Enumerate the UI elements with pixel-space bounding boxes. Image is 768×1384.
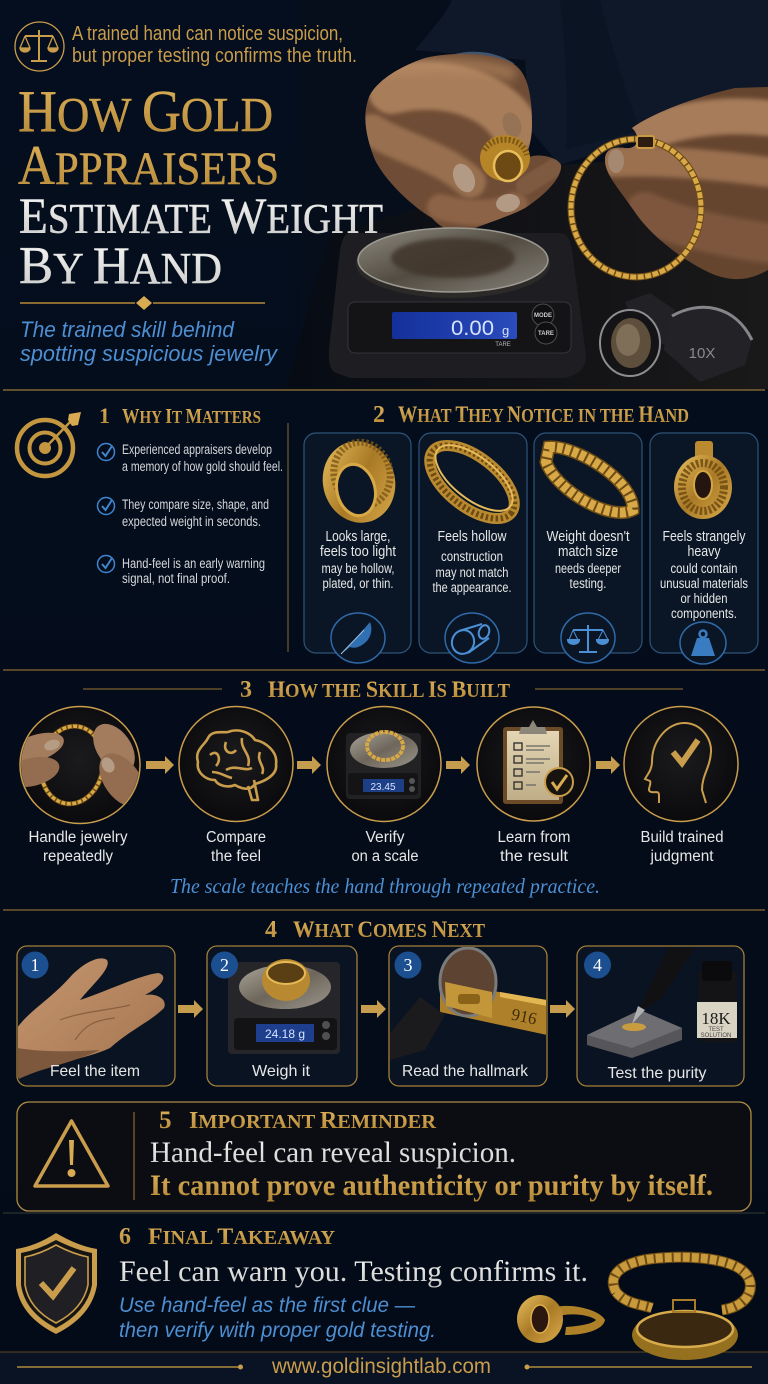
panel: final takeaway: then verify with proper gold testing. [119, 1319, 436, 1342]
top quote with scale icon [15, 22, 357, 71]
heading: what they notice in the hand: WHAT THEY NOTICE IN THE HAND [398, 402, 689, 427]
card: weight does not match size: needs deeper [555, 561, 621, 576]
panel: final takeaway: Use hand-feel as the first clue — [119, 1294, 416, 1317]
step: verify on a scale [327, 706, 441, 865]
right hand [600, 85, 768, 285]
subtitle [20, 317, 279, 366]
table [285, 150, 768, 389]
number badge [584, 952, 611, 978]
number badge: 4 [593, 955, 602, 975]
icon: balance [561, 613, 615, 663]
arrow [361, 1000, 386, 1018]
step: verify on a scale: on a scale [352, 848, 418, 865]
heading: what they notice in the hand: 2 [373, 402, 385, 428]
card: weight does not match size: match size [558, 543, 618, 560]
heading: how the skill is built [83, 677, 683, 703]
step: build trained judgment: judgment [650, 848, 714, 865]
icon: pen, stone and acid bottle: TEST [708, 1027, 724, 1033]
icon: shield with check [16, 1233, 97, 1334]
icon: curb chain [546, 447, 633, 513]
title: ESTIMATE WEIGHT [19, 189, 383, 245]
hero photo: hands, scale, bracelet and loupe [285, 0, 768, 389]
card: feels hollow: may not match [436, 565, 508, 580]
icon: loupe over hallmark band [390, 948, 547, 1060]
arrow [178, 1000, 203, 1018]
card: weight does not match size [534, 433, 642, 663]
card: looks large, feels too light: plated, or thin. [322, 576, 394, 591]
gold ring in fingers [480, 135, 530, 181]
arrow [146, 756, 174, 774]
jacket [415, 0, 768, 165]
card: looks large, feels too light: Looks large, [326, 528, 390, 545]
step: compare the feel [179, 706, 293, 865]
number badge [22, 952, 48, 978]
subtitle: The trained skill behind [20, 317, 235, 342]
card: looks large, feels too light: may be hollow, [322, 561, 394, 576]
card: feels strangely heavy: could contain [670, 561, 738, 576]
heading: what comes next: 4 [265, 917, 277, 943]
icon: open palm [17, 958, 165, 1080]
digital scale: TARE [495, 342, 511, 348]
scale readout: 0.00 [451, 317, 494, 340]
checklist: They compare size, shape, and [122, 497, 269, 512]
icon: hollow cylinder [445, 613, 499, 663]
icon: scale with ring [228, 959, 340, 1054]
icon: gold pendant [674, 441, 732, 519]
footer [0, 1352, 768, 1384]
card: weight does not match size: testing. [570, 576, 606, 591]
card: feels strangely heavy: Feels strangely [662, 528, 746, 545]
icon: hollow filigree ring [417, 432, 527, 532]
icon: small scale with ring: 23.45 [370, 782, 396, 793]
top quote with scale icon: A trained hand can notice suspicion, [72, 23, 343, 45]
checklist: signal, not final proof. [122, 571, 230, 586]
title: HOW GOLD [18, 78, 273, 144]
digital scale: TARE [538, 331, 554, 337]
arrow [596, 756, 620, 774]
icon: kettle weight [680, 622, 726, 664]
step: compare the feel: the feel [211, 848, 261, 865]
heading: important reminder: 5 [159, 1107, 172, 1134]
icon: head with check mark [645, 723, 711, 803]
heading: important reminder: IMPORTANT REMINDER [189, 1108, 436, 1134]
subtitle: spotting suspicious jewelry [20, 341, 279, 366]
panel: final takeaway [16, 1224, 750, 1360]
icon: engraved gold ring [314, 434, 404, 530]
icon: scale with ring: 24.18 g [265, 1027, 305, 1041]
left hand [365, 54, 562, 228]
checklist: a memory of how gold should feel. [122, 459, 283, 474]
footer: www.goldinsightlab.com [271, 1355, 491, 1378]
arrow [297, 756, 321, 774]
step: handle jewelry repeatedly [19, 706, 141, 864]
title [18, 78, 383, 295]
icon: clipboard checklist [503, 720, 573, 804]
icon: balance scale [15, 22, 64, 71]
step: build trained judgment [624, 706, 738, 865]
card: looks large, feels too light: feels too light [320, 543, 397, 560]
icon: pen, stone and acid bottle: SOLUTION [701, 1033, 731, 1039]
heading: how the skill is built: HOW THE SKILL IS BUILT [268, 677, 510, 702]
heading: why it matters: 1 [99, 403, 110, 428]
panel: final takeaway: Feel can warn you. Testing confirms it. [119, 1255, 588, 1288]
title: BY HAND [19, 237, 222, 295]
card: feels hollow: Feels hollow [438, 528, 507, 545]
card: feels strangely heavy: components. [671, 606, 737, 621]
card: feels strangely heavy: unusual materials [660, 576, 748, 591]
icon: loupe over hallmark band: 916 [510, 1005, 539, 1029]
card: feels strangely heavy: heavy [688, 543, 721, 560]
number badge: 2 [220, 955, 229, 975]
arrow [446, 756, 470, 774]
panel: important reminder: Hand-feel can reveal suspicion. [150, 1136, 516, 1169]
icon: small scale with ring [346, 732, 421, 799]
checklist: expected weight in seconds. [122, 514, 261, 529]
card: feels hollow: the appearance. [432, 580, 512, 595]
checklist: Hand-feel is an early warning [122, 556, 265, 571]
jewelry group: chain, ring and signet [517, 1257, 750, 1360]
icon: hands holding bracelet [21, 724, 138, 806]
step: learn from the result [477, 707, 590, 865]
top quote with scale icon: but proper testing confirms the truth. [72, 45, 357, 67]
title: APPRAISERS [18, 135, 279, 197]
heading: what comes next: WHAT COMES NEXT [293, 917, 485, 942]
icon: pen, stone and acid bottle: 18K [701, 1009, 731, 1028]
jeweler loupe [600, 293, 752, 382]
step: handle jewelry repeatedly: Handle jewelry [28, 829, 128, 846]
icon: target with arrow [17, 412, 81, 476]
panel: important reminder: It cannot prove authenticity or purity by itself. [150, 1169, 713, 1202]
digital scale: g [502, 323, 509, 338]
step card: read the hallmark [389, 946, 547, 1086]
icon: pen, stone and acid bottle [587, 948, 737, 1058]
heading: why it matters: WHY IT MATTERS [122, 404, 261, 428]
panel: why it matters [17, 403, 283, 586]
step card: feel the item [17, 946, 175, 1086]
step: compare the feel: Compare [206, 829, 266, 846]
caption: the scale teaches the hand: The scale teaches the hand through repeated practice. [170, 874, 600, 898]
arrow [550, 1000, 575, 1018]
icon: feather [331, 613, 385, 663]
checklist [98, 442, 283, 586]
number badge [394, 952, 422, 978]
icon: warning triangle [35, 1121, 108, 1186]
number badge [211, 952, 238, 978]
panel: important reminder [17, 1102, 751, 1211]
title divider ornament [20, 296, 265, 310]
digital scale [329, 228, 586, 378]
step card: test the purity [577, 946, 744, 1086]
step: learn from the result: Learn from [498, 829, 570, 846]
digital scale: MODE [534, 313, 552, 319]
step: handle jewelry repeatedly: repeatedly [43, 848, 113, 865]
icon: brain [197, 730, 276, 800]
card: feels hollow [417, 432, 527, 663]
checklist: Experienced appraisers develop [122, 442, 272, 457]
card: looks large, feels too light [304, 433, 411, 663]
step card: weigh it [207, 946, 357, 1086]
gold bracelet in hero [571, 136, 701, 277]
card: feels hollow: construction [441, 549, 503, 564]
step: learn from the result: the result [500, 848, 569, 865]
jeweler loupe: 10X [689, 345, 715, 362]
step card: test the purity: Test the purity [608, 1065, 706, 1082]
step card: feel the item: Feel the item [50, 1063, 140, 1080]
heading: how the skill is built: 3 [240, 677, 252, 703]
card: feels strangely heavy: or hidden [680, 591, 728, 606]
card: weight does not match size: Weight doesn't [546, 528, 630, 545]
step: verify on a scale: Verify [366, 829, 405, 846]
step card: read the hallmark: Read the hallmark [402, 1063, 529, 1080]
step card: weigh it: Weigh it [252, 1063, 311, 1080]
number badge: 1 [30, 955, 40, 975]
number badge: 3 [404, 955, 412, 975]
heading: final takeaway: 6 [119, 1224, 131, 1250]
heading: final takeaway: FINAL TAKEAWAY [148, 1224, 335, 1249]
card: feels strangely heavy [650, 433, 758, 664]
step: build trained judgment: Build trained [640, 829, 724, 846]
